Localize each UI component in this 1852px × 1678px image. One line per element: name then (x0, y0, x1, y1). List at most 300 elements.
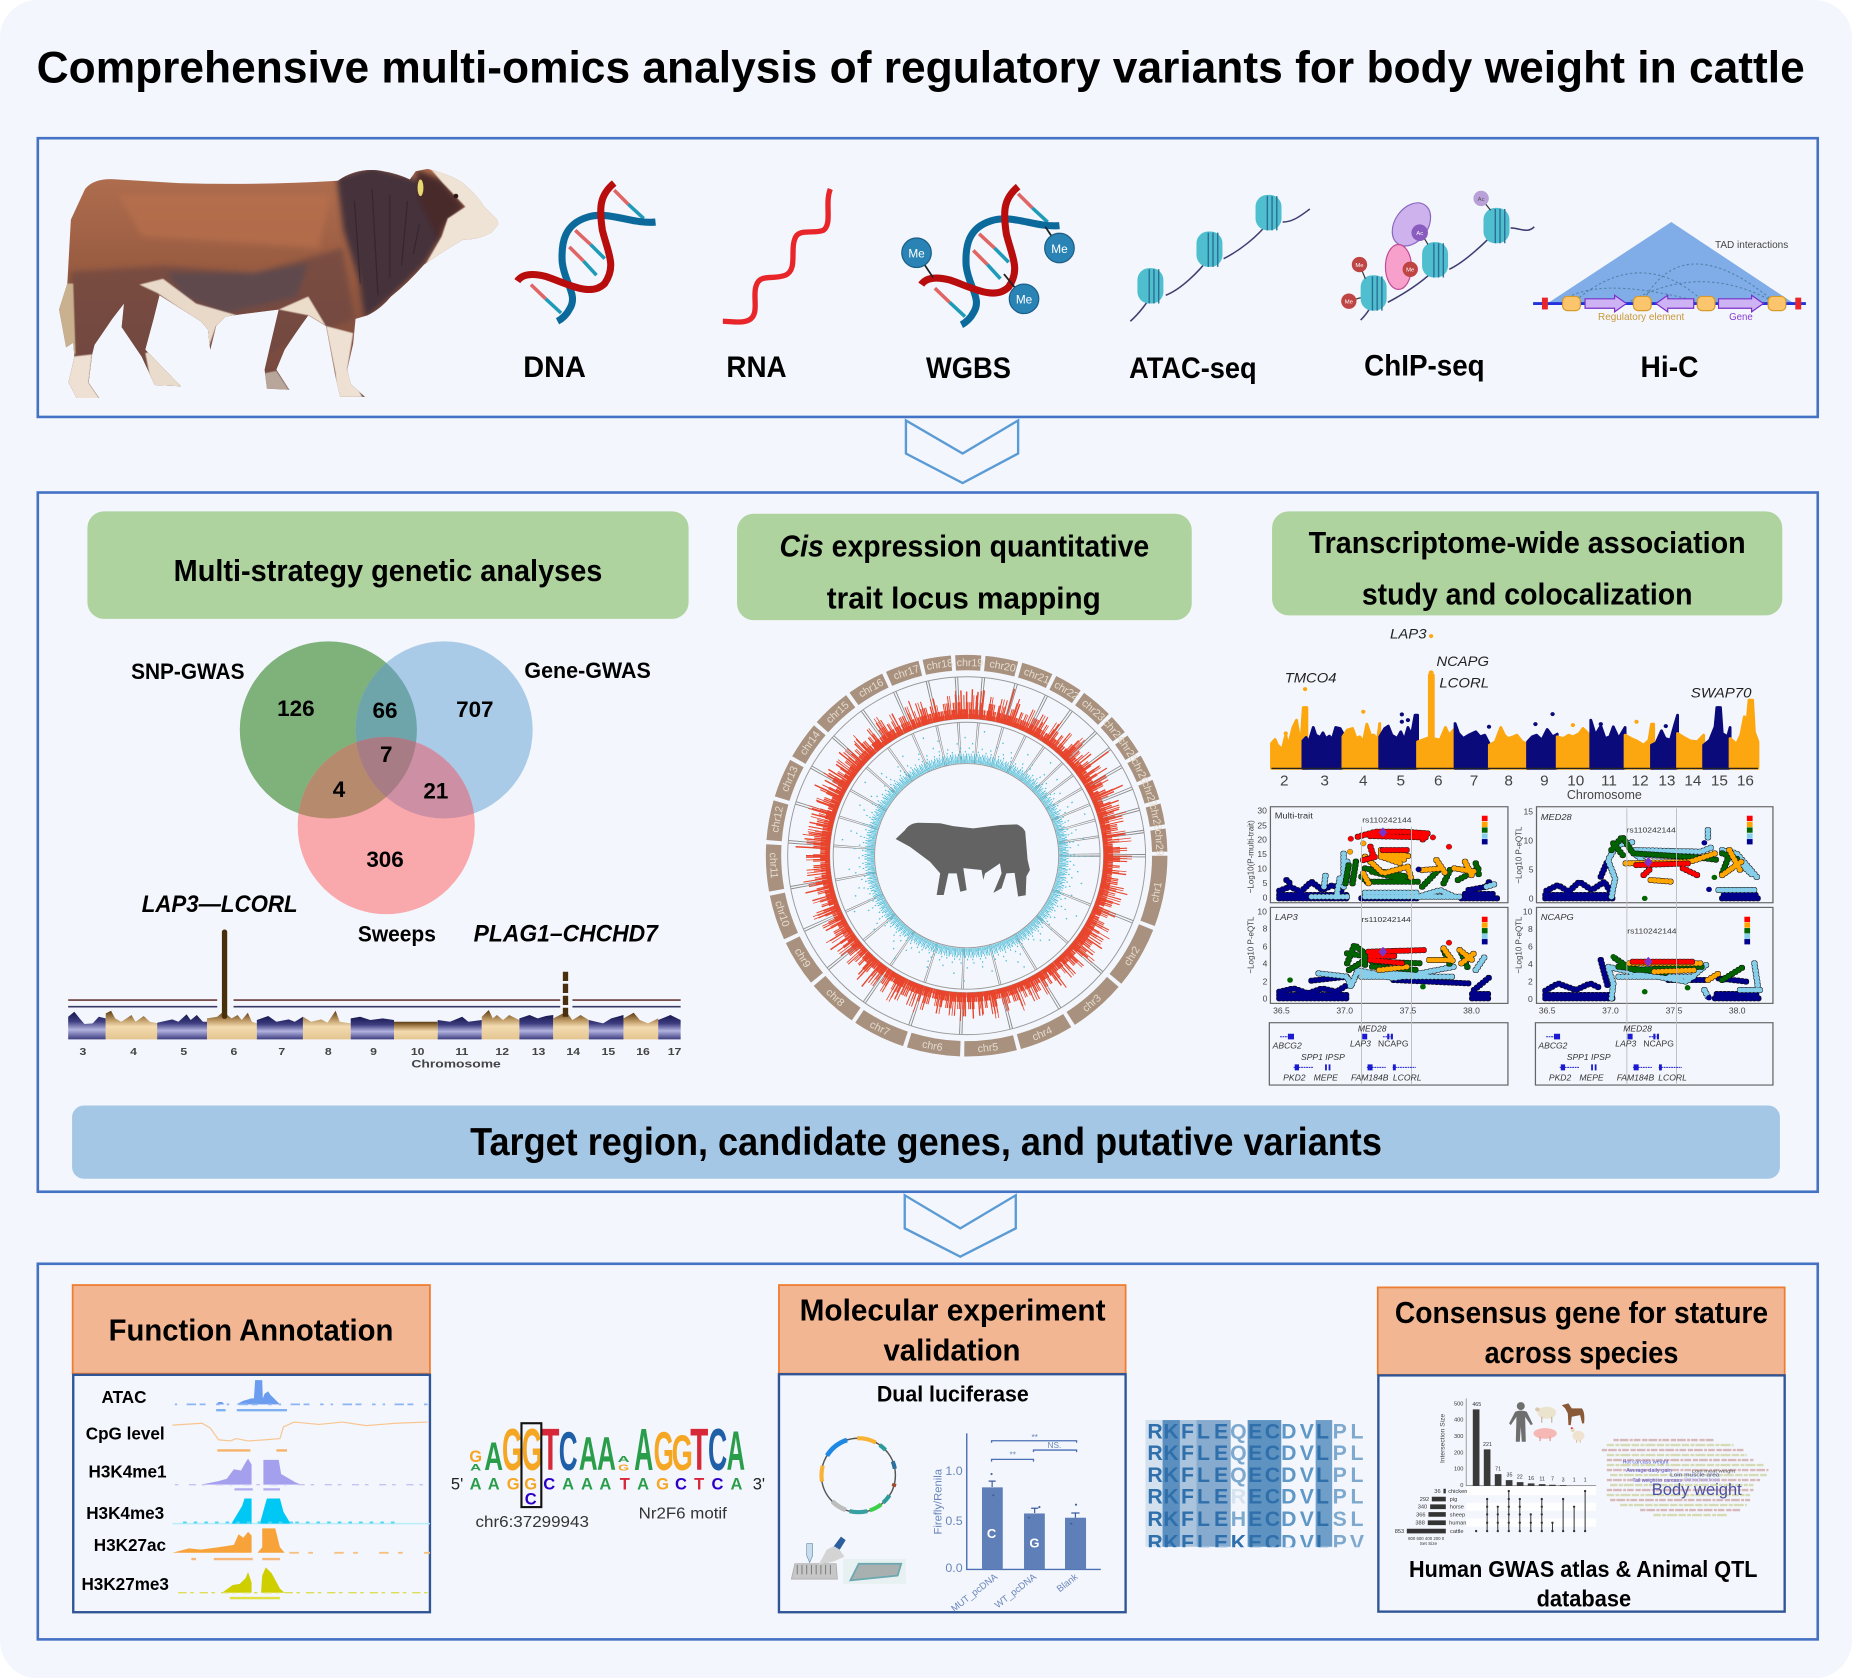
chart: Venn diagram: 707 (456, 697, 494, 722)
label: ChIP-seq: ChIP-seq (1364, 350, 1485, 383)
chart: Venn diagram: 21 (423, 778, 448, 803)
track: H3K27me3: H3K27me3 (81, 1575, 169, 1594)
chromosome labels: chr4 (1030, 1024, 1054, 1044)
chart: selective sweep Manhattan: 5 (180, 1047, 187, 1058)
chromosome labels: chr17 (892, 663, 921, 683)
chromosome labels: chr29 (1152, 829, 1166, 856)
panel: dual luciferase (779, 1374, 1126, 1615)
track sector outlines (788, 677, 1146, 1035)
caption: Human GWAS atlas and Animal QTL database: Human GWAS atlas & Animal QTL (1409, 1556, 1758, 1582)
chromosome labels: chr2 (1122, 944, 1143, 968)
motif sequence row: A (637, 1474, 649, 1493)
chart: protein sequence alignment: RKFLE (1147, 1441, 1228, 1465)
chromosome labels: chr25 (1115, 735, 1140, 764)
chromosome labels: chr6 (921, 1039, 944, 1054)
chromosome labels: chr24 (1100, 717, 1127, 745)
panel: dual luciferase: Dual luciferase (877, 1382, 1029, 1407)
track: CpG level (86, 1422, 428, 1450)
icon: RNA strand (723, 189, 830, 322)
label: RNA: RNA (726, 351, 787, 384)
label: PLAG1-CHCHD7: PLAG1–CHCHD7 (474, 921, 660, 947)
chart: Venn diagram (131, 641, 651, 946)
chromosome labels: chr1 (1149, 881, 1165, 903)
gene track right: LCORL (1658, 1073, 1687, 1083)
chart: TWAS Manhattan plot: LAP3 (1390, 627, 1426, 642)
chart: UpSet plot: 22 (1517, 1475, 1523, 1481)
chart: Nr2F6 motif logo: C (525, 1490, 537, 1509)
chart: protein sequence alignment: EC (1248, 1463, 1280, 1487)
icon: Hi-C TAD triangle (1533, 222, 1806, 323)
chart: UpSet plot: 1 (1573, 1478, 1576, 1484)
plot: LAP3 locus: 4 (1263, 959, 1268, 969)
icon: ChIP-seq nucleosomes and antibodies: Me (1355, 263, 1364, 269)
chromosome labels: chr16 (857, 677, 886, 700)
icon: Simmental bull photo (53, 165, 508, 402)
chart: Venn diagram: Sweeps (358, 921, 436, 946)
track: ATAC (102, 1380, 430, 1410)
chromosome labels: chr11 (767, 852, 780, 879)
heading: Cis-eQTL mapping (737, 514, 1192, 620)
chart: protein sequence alignment: EC (1248, 1484, 1280, 1508)
chart: luciferase bar chart: 1.0 (945, 1464, 963, 1478)
chart: Nr2F6 motif logo: A (484, 1435, 503, 1480)
chart: Nr2F6 motif logo: A (634, 1417, 653, 1483)
icon: ChIP-seq nucleosomes and antibodies: Ac (1478, 197, 1485, 203)
panel: genetic analyses (38, 493, 1818, 1192)
chart: TWAS Manhattan plot: SWAP70 (1691, 686, 1752, 702)
chart: Nr2F6 motif logo: A (579, 1428, 598, 1481)
chart: UpSet plot: 36 (1434, 1489, 1441, 1495)
gene track left (1269, 827, 1508, 1085)
red expression bars (796, 689, 1125, 1019)
track: H3K27me3 (81, 1567, 430, 1598)
plot: Multi-trait locus: −Log10(P-multi-trait) (1245, 820, 1256, 893)
chart: UpSet plot: 7 (1551, 1477, 1554, 1483)
caption: Human GWAS atlas and Animal QTL database (1409, 1556, 1758, 1611)
chart: protein sequence alignment: RKFLE (1147, 1531, 1228, 1555)
chart: TWAS Manhattan plot: 6 (1434, 774, 1443, 789)
chart: luciferase bar chart (932, 1433, 1101, 1615)
chart: TWAS Manhattan plot: 14 (1684, 774, 1701, 789)
chart: Nr2F6 motif logo: G (469, 1447, 482, 1466)
chart: Nr2F6 motif logo: A (597, 1428, 616, 1481)
chart: protein sequence alignment: PL (1333, 1441, 1363, 1465)
chart: selective sweep Manhattan: 9 (370, 1047, 377, 1058)
icon: DNA helix (517, 183, 656, 321)
chart: Nr2F6 motif logo: G (618, 1463, 629, 1473)
chart: selective sweep Manhattan: 10 (411, 1047, 425, 1058)
chromosome labels: chr21 (1022, 666, 1051, 687)
plot: NCAPG locus: 37.0 (1602, 1006, 1619, 1016)
chart: trait word cloud: Loin muscle area (1670, 1473, 1720, 1479)
chart: Venn diagram: 66 (373, 698, 398, 723)
chart: protein sequence alignment: PL (1333, 1463, 1363, 1487)
chart: UpSet plot: 853 (1395, 1529, 1404, 1535)
chart: protein sequence alignment: L (1316, 1507, 1329, 1531)
chart: protein sequence alignment: Q (1230, 1463, 1247, 1487)
chart: UpSet plot: 100 (1454, 1467, 1463, 1473)
plot: MED28 locus: 10 (1524, 836, 1533, 845)
chromosome labels: chr27 (1139, 780, 1159, 809)
chart: protein sequence alignment: L (1316, 1463, 1329, 1487)
icon: ChIP-seq nucleosomes and antibodies (1341, 191, 1534, 320)
chart: TWAS Manhattan plot (1271, 627, 1758, 802)
chart: trait word cloud: Hot carcass weight (1622, 1459, 1669, 1465)
arrow: top to middle panel (906, 420, 1018, 483)
gene track left: LCORL (1393, 1073, 1422, 1083)
chart: selective sweep Manhattan: 17 (668, 1047, 681, 1058)
chart: TWAS Manhattan plot: 3 (1320, 774, 1329, 789)
title: Comprehensive multi-omics analysis of regulatory variants for body weight in cattle (37, 42, 1805, 93)
chromosome ring (774, 663, 1160, 1049)
chromosome labels (767, 657, 1166, 1055)
chart: TWAS Manhattan plot: 4 (1359, 774, 1368, 789)
plot: Multi-trait locus: 0 (1263, 893, 1268, 902)
chart: luciferase bar chart: WT_pcDNA (993, 1571, 1039, 1611)
plot: MED28 locus (1513, 807, 1773, 903)
arrow: middle to bottom panel (905, 1195, 1016, 1257)
gene track left: SPP1 IPSP (1301, 1052, 1345, 1062)
plot: LAP3 locus: LAP3 (1275, 912, 1298, 922)
chromosome labels: chr13 (779, 764, 801, 794)
gene track right: SPP1 IPSP (1567, 1052, 1611, 1062)
chart: Nr2F6 motif logo: T (690, 1417, 708, 1483)
heading: Cis-eQTL mapping: trait locus mapping (827, 580, 1101, 615)
plot: NCAPG locus: 38.0 (1729, 1006, 1746, 1016)
track: H3K27ac (94, 1528, 430, 1559)
chromosome labels: chr12 (769, 805, 786, 834)
icon: well plates and pipette (791, 1537, 906, 1584)
chart: TWAS Manhattan plot: 9 (1540, 774, 1549, 789)
chart: UpSet plot: pig (1450, 1497, 1457, 1503)
chart: circular eQTL plot (767, 657, 1166, 1055)
motif sequence row: C (712, 1474, 724, 1493)
chart: trait word cloud (1602, 1440, 1768, 1515)
chart: Nr2F6 motif logo: Nr2F6 motif (639, 1505, 727, 1522)
chromosome labels: chr9 (792, 946, 813, 970)
chart: TWAS Manhattan plot: 15 (1711, 774, 1728, 789)
motif sequence row: G (656, 1474, 669, 1493)
label: LAP3-LCORL: LAP3—LCORL (142, 892, 298, 918)
chart: protein sequence alignment: EC (1248, 1531, 1280, 1555)
gene track left: PKD2 (1283, 1073, 1306, 1083)
chart: TWAS Manhattan plot: NCAPG (1436, 654, 1489, 670)
heading: Function Annotation (73, 1285, 430, 1374)
chart: protein sequence alignment: Q (1230, 1419, 1247, 1443)
motif sequence row: AA (470, 1474, 500, 1493)
chart: TWAS Manhattan plot: 16 (1737, 774, 1754, 789)
chart: protein sequence alignment: RKFLE (1147, 1463, 1228, 1487)
plot: MED28 locus: rs110242144 (1627, 826, 1676, 835)
plot: LAP3 locus: 0 (1263, 994, 1268, 1004)
chart: Nr2F6 motif logo: G (654, 1422, 674, 1483)
motif sequence row: C (543, 1474, 555, 1493)
chart: UpSet plot: 340 (1418, 1505, 1427, 1511)
chart: selective sweep Manhattan: 7 (278, 1047, 285, 1058)
chart: luciferase bar chart: 0.0 (945, 1561, 963, 1575)
plot: LAP3 locus: 8 (1263, 924, 1268, 934)
chart: UpSet plot: 35 (1506, 1473, 1512, 1479)
chart: selective sweep Manhattan: 4 (130, 1047, 138, 1058)
chart: Venn diagram: 126 (277, 696, 315, 721)
chart: UpSet plot: 400 (1454, 1418, 1463, 1424)
motif sequence row: GG (507, 1474, 537, 1493)
chart: trait word cloud: Loin meat weight (1692, 1469, 1736, 1474)
banner: target region: Target region, candidate genes, and putative variants (470, 1121, 1382, 1164)
plot: Multi-trait locus: 20 (1257, 835, 1267, 845)
heading: Multi-strategy genetic analyses: Multi-strategy genetic analyses (174, 553, 602, 588)
gene track right: FAM184B (1617, 1073, 1655, 1083)
plot: NCAPG locus (1513, 907, 1773, 1016)
chart: luciferase bar chart: NS. (1048, 1441, 1061, 1450)
heading: Molecular experiment validation: validation (883, 1333, 1020, 1368)
plot: LAP3 locus: 37.0 (1336, 1006, 1353, 1016)
chart: protein sequence alignment: EC (1248, 1419, 1280, 1443)
plot: LAP3 locus: rs110242144 (1361, 915, 1411, 924)
plot: Multi-trait locus: 30 (1257, 806, 1267, 815)
plot: MED28 locus: 0 (1529, 894, 1534, 903)
gene track right (1535, 808, 1773, 1085)
heading: TWAS and colocalization (1272, 511, 1782, 615)
label: WGBS: WGBS (926, 352, 1011, 385)
chart: protein sequence alignment: SL (1333, 1507, 1363, 1531)
plot: MED28 locus: 15 (1524, 807, 1533, 816)
label: Hi-C: Hi-C (1641, 351, 1698, 384)
icon: human and animals (1509, 1402, 1584, 1443)
chromosome labels: chr3 (1080, 992, 1104, 1015)
chart: UpSet plot: 465 (1472, 1402, 1481, 1408)
motif sequence row: T (694, 1474, 704, 1493)
chart: trait word cloud: Osteochondrosis (1684, 1478, 1720, 1484)
chart: Venn diagram: Gene-GWAS (524, 658, 651, 683)
chromosome labels: chr7 (868, 1019, 892, 1039)
chromosome labels: chr5 (977, 1041, 999, 1055)
plot: Multi-trait locus (1245, 806, 1508, 903)
icon: ChIP-seq nucleosomes and antibodies: Me (1345, 300, 1354, 306)
plot: Multi-trait locus: 25 (1257, 821, 1267, 830)
chart: UpSet plot: 71 (1495, 1467, 1501, 1473)
plot: MED28 locus: −Log10 P-eQTL (1513, 826, 1524, 884)
chromosome labels: chr15 (824, 699, 852, 726)
heading: Molecular experiment validation (779, 1285, 1126, 1374)
plot: Multi-trait locus: 10 (1257, 864, 1267, 874)
heading: Consensus gene for stature: across species (1485, 1335, 1678, 1370)
chart: protein sequence alignment: EC (1248, 1507, 1280, 1531)
chart: UpSet plot: 16 (1528, 1476, 1534, 1482)
chart: trait word cloud: Tail weight in carcass (1632, 1478, 1682, 1484)
chart: TWAS Manhattan plot: 7 (1470, 774, 1478, 789)
heading: Consensus gene for stature (1378, 1287, 1785, 1375)
chart: UpSet plot: 221 (1483, 1442, 1492, 1448)
gene track right: MEPE (1579, 1073, 1604, 1083)
chart: selective sweep Manhattan: 8 (325, 1047, 332, 1058)
icon: methylated DNA: Me (1016, 293, 1033, 307)
chart: Venn diagram: SNP-GWAS (131, 659, 245, 684)
chart: UpSet plot: 3 (1562, 1478, 1565, 1484)
icon: ChIP-seq nucleosomes and antibodies: Me (1406, 268, 1415, 274)
chart: protein sequence alignment: H (1231, 1507, 1246, 1531)
chart: protein sequence alignment: DV (1281, 1507, 1315, 1531)
plot: NCAPG locus: 6 (1528, 942, 1533, 952)
plot: NCAPG locus: 8 (1528, 924, 1533, 934)
banner: target region (72, 1106, 1780, 1179)
chart: Venn diagram: 7 (380, 742, 392, 767)
chart: selective sweep Manhattan: 11 (455, 1047, 468, 1058)
chart: selective sweep Manhattan: 6 (231, 1047, 237, 1058)
heading: TWAS and colocalization: study and colocalization (1362, 577, 1693, 612)
chart: TWAS Manhattan plot: LCORL (1439, 676, 1489, 692)
icon: ChIP-seq nucleosomes and antibodies: Ac (1416, 231, 1423, 237)
plot: MED28 locus: 5 (1529, 865, 1534, 874)
chart: luciferase bar chart: Firefly/Renila (932, 1468, 944, 1535)
icon: methylated DNA: Me (908, 246, 925, 260)
caption: Human GWAS atlas and Animal QTL database: database (1537, 1585, 1631, 1611)
track: ATAC: ATAC (102, 1388, 147, 1407)
blue expression dots (841, 731, 1092, 981)
chart: UpSet plot: 1 (1584, 1478, 1587, 1484)
chart: UpSet plot (1395, 1398, 1596, 1546)
chart: selective sweep Manhattan: 15 (602, 1047, 615, 1058)
chart: protein sequence alignment: Q (1230, 1441, 1247, 1465)
motif sequence row: T (620, 1474, 630, 1493)
chart: luciferase bar chart: ** (1031, 1433, 1039, 1442)
chart: Nr2F6 motif logo: chr6:37299943 (476, 1514, 589, 1531)
chart: luciferase bar chart: MUT_pcDNA (949, 1571, 1000, 1615)
gene track right: PKD2 (1549, 1073, 1572, 1083)
heading: Function Annotation: Function Annotation (109, 1313, 393, 1348)
icon: plasmid (821, 1438, 895, 1512)
chart: Nr2F6 motif logo: A (618, 1455, 630, 1464)
motif sequence row: A (730, 1474, 742, 1493)
heading: Cis-eQTL mapping: Cis expression quantitative (780, 528, 1149, 563)
chart: luciferase bar chart: G (1029, 1535, 1039, 1550)
gene track left: LAP3 (1350, 1039, 1371, 1048)
chart: UpSet plot: 200 (1454, 1450, 1463, 1456)
chart: TWAS Manhattan plot: 12 (1632, 774, 1649, 789)
gene track left: ABCG2 (1272, 1041, 1302, 1050)
motif sequence row: AAA (562, 1474, 611, 1493)
plot: LAP3 locus: 10 (1257, 907, 1267, 916)
gene track right: ABCG2 (1537, 1041, 1568, 1050)
chromosome labels: chr22 (1052, 679, 1081, 703)
chart: UpSet plot: sheep (1450, 1512, 1465, 1518)
chart: luciferase bar chart: ** (1009, 1450, 1017, 1459)
plot: Multi-trait locus: Multi-trait (1275, 811, 1313, 820)
chart: UpSet plot: human (1449, 1521, 1466, 1527)
motif sequence row: C (675, 1474, 687, 1493)
heading: Molecular experiment validation: Molecular experiment (800, 1292, 1106, 1327)
plot: NCAPG locus: 10 (1523, 907, 1533, 917)
plot: LAP3 locus: 37.5 (1400, 1006, 1417, 1016)
chart: selective sweep Manhattan: 14 (566, 1047, 581, 1058)
chart: epigenomic tracks (73, 1375, 430, 1612)
gene track right: LAP3 (1615, 1039, 1637, 1048)
chart: luciferase bar chart: Blank (1055, 1571, 1080, 1595)
heading: Consensus gene for stature: Consensus gene for stature (1395, 1295, 1768, 1330)
heading: TWAS and colocalization: Transcriptome-wide association (1309, 525, 1746, 560)
plot: LAP3 locus: −Log10 P-eQTL (1245, 916, 1256, 974)
chart: protein sequence alignment: PV (1333, 1531, 1365, 1555)
chart: selective sweep Manhattan (68, 932, 681, 1070)
motif sequence row: 5' (451, 1474, 463, 1493)
chart: TWAS Manhattan plot: 11 (1601, 774, 1617, 789)
chart: regional association plots (1245, 806, 1773, 1085)
chart: trait word cloud: Average daily gain (1626, 1468, 1672, 1474)
chart: protein sequence alignment: RKFLE (1147, 1419, 1228, 1443)
chart: TWAS Manhattan plot: 10 (1567, 774, 1584, 789)
chart: selective sweep Manhattan: 13 (532, 1047, 545, 1058)
track: H3K4me1: H3K4me1 (89, 1463, 167, 1482)
chart: protein sequence alignment: DV (1281, 1463, 1315, 1487)
gene track right: MED28 (1623, 1024, 1652, 1034)
label: DNA: DNA (523, 351, 586, 384)
chart: luciferase bar chart: C (987, 1526, 997, 1541)
icon: Hi-C TAD triangle: TAD interactions (1715, 240, 1788, 251)
plot: LAP3 locus: 2 (1263, 977, 1268, 986)
plot: NCAPG locus: 2 (1528, 977, 1533, 987)
plot: NCAPG locus: rs110242144 (1627, 927, 1677, 936)
chart: protein sequence alignment: R (1231, 1484, 1246, 1508)
chromosome labels: chr18 (926, 657, 954, 673)
chart: protein sequence alignment: DV (1281, 1484, 1315, 1508)
track: H3K4me3: H3K4me3 (86, 1504, 164, 1523)
chart: protein sequence alignment: L (1316, 1419, 1329, 1443)
track: H3K27ac: H3K27ac (94, 1536, 167, 1555)
motif sequence row: 3' (753, 1474, 765, 1493)
icon: methylated DNA: Me (1051, 242, 1068, 256)
chart: UpSet plot: 800 600 400 200 0 (1408, 1536, 1445, 1541)
plot: NCAPG locus: NCAPG (1541, 912, 1574, 922)
chart: luciferase bar chart: 0.5 (945, 1514, 963, 1528)
chart: protein sequence alignment: L (1316, 1484, 1329, 1508)
chromosome labels: chr20 (988, 658, 1017, 675)
chart: protein sequence alignment: DV (1281, 1531, 1315, 1555)
chart: TWAS Manhattan plot: 2 (1280, 774, 1289, 789)
plot: Multi-trait locus: rs110242144 (1362, 816, 1412, 824)
icon: cattle silhouette (896, 823, 1030, 896)
chart: protein sequence alignment: RKFLE (1147, 1484, 1228, 1508)
chromosome labels: chr14 (798, 729, 823, 758)
icon: Hi-C TAD triangle: Gene (1729, 312, 1753, 323)
chart: Nr2F6 motif logo: G (672, 1427, 693, 1481)
chart: UpSet plot: 11 (1539, 1477, 1545, 1483)
plot: NCAPG locus: 4 (1528, 959, 1533, 969)
track: H3K4me3 (86, 1498, 430, 1524)
gene track right: NCAPG (1643, 1039, 1674, 1048)
plot: Multi-trait locus: 5 (1263, 878, 1268, 888)
chart: protein sequence alignment: PL (1333, 1419, 1363, 1443)
chromosome labels: chr8 (823, 986, 847, 1009)
plot: NCAPG locus: 37.5 (1666, 1006, 1683, 1016)
chart: UpSet plot: Intersection Size (1439, 1414, 1446, 1463)
track: CpG level: CpG level (86, 1424, 165, 1443)
gene track left: MEPE (1314, 1073, 1338, 1083)
icon: ATAC-seq nucleosomes (1130, 195, 1310, 321)
plot: NCAPG locus: 36.5 (1539, 1006, 1556, 1016)
chart: TWAS Manhattan plot: Chromosome (1567, 787, 1642, 802)
panel: downstream validation (38, 1264, 1818, 1639)
chart: UpSet plot: horse (1450, 1505, 1464, 1511)
chart: UpSet plot: 500 (1454, 1401, 1463, 1407)
chart: UpSet plot: cattle (1450, 1529, 1464, 1535)
chart: protein sequence alignment: L (1316, 1531, 1329, 1555)
chart: protein sequence alignment: PL (1333, 1484, 1363, 1508)
plot: NCAPG locus: −Log10 P-eQTL (1513, 916, 1524, 974)
icon: Hi-C TAD triangle: Regulatory element (1598, 312, 1684, 323)
plot: LAP3 locus: 36.5 (1273, 1006, 1290, 1016)
plot: LAP3 locus (1245, 907, 1508, 1016)
chart: TWAS Manhattan plot: 5 (1397, 774, 1405, 789)
